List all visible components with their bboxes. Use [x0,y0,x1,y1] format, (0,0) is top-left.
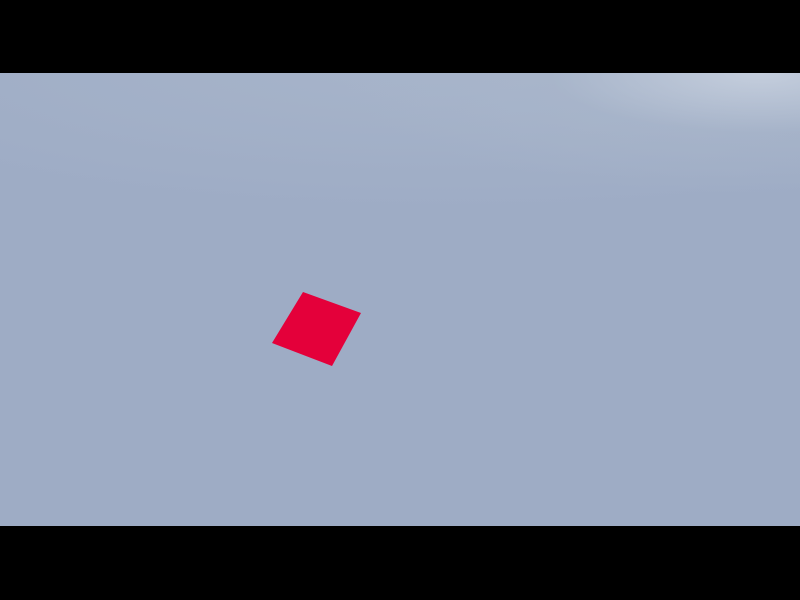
top black bar [0,0,800,73]
scene background [0,73,800,526]
bottom black bar [0,526,800,600]
